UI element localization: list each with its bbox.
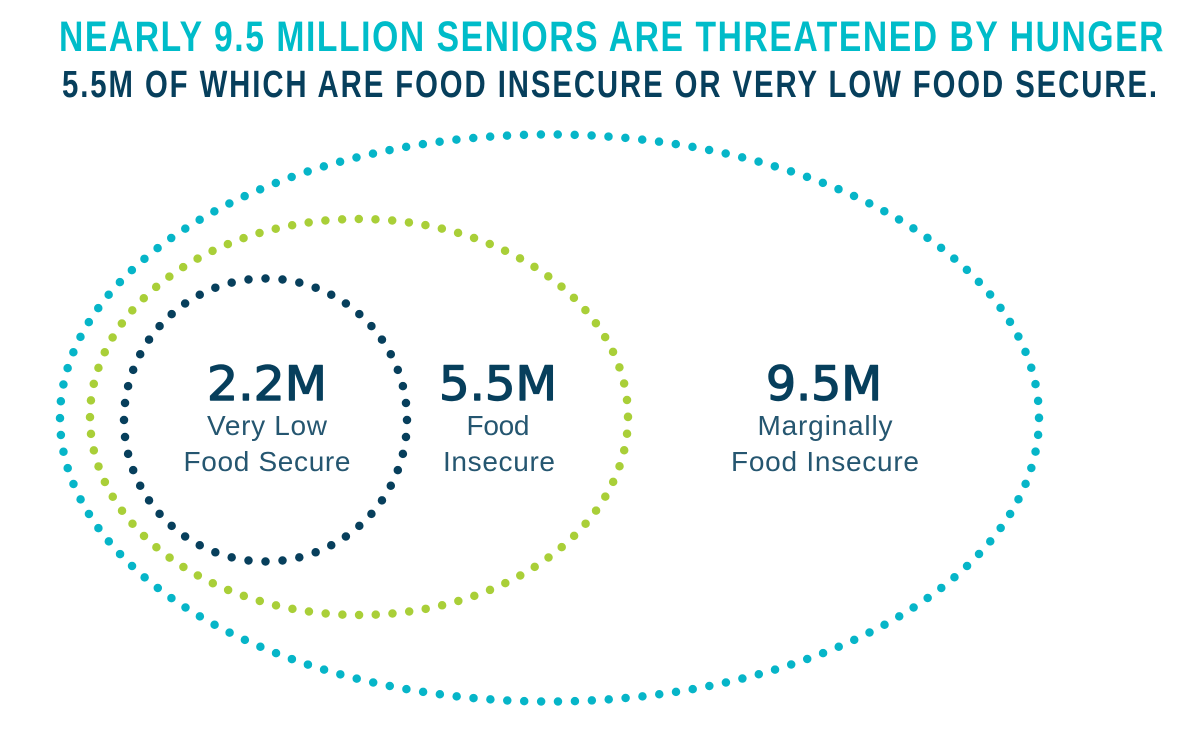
label: 2.2M very low food secure: [184, 357, 350, 477]
label: 2.2M very low food secure: Very Low: [207, 410, 328, 441]
label: 5.5M food insecure: [439, 357, 557, 477]
dotted circle: very low food secure: [124, 278, 407, 562]
label: 9.5M marginally food insecure: 9.5M: [766, 357, 882, 412]
label: 2.2M very low food secure: 2.2M: [207, 357, 327, 412]
label: 5.5M food insecure: Insecure: [443, 446, 555, 477]
label: 5.5M food insecure: 5.5M: [439, 357, 557, 412]
label: 9.5M marginally food insecure: [731, 357, 919, 477]
dotted ellipse: food insecure: [90, 219, 628, 615]
dotted ellipse: marginally food insecure: [60, 134, 1039, 702]
label: 9.5M marginally food insecure: Marginally: [758, 410, 892, 441]
label: 9.5M marginally food insecure: Food Insecure: [731, 446, 919, 477]
label: 2.2M very low food secure: Food Secure: [184, 446, 350, 477]
label: 5.5M food insecure: Food: [466, 410, 530, 441]
